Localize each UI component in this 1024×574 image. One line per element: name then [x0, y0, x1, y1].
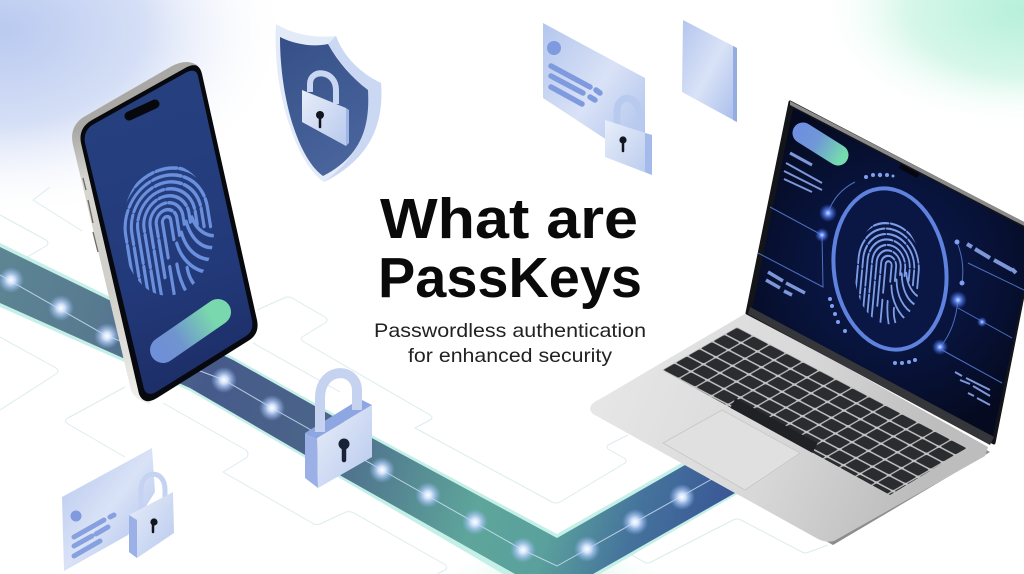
shield with padlock icon: [276, 24, 381, 182]
keyboard: [662, 327, 968, 495]
small card avatar: [70, 510, 82, 522]
card avatar: [547, 41, 561, 55]
card text lines: [551, 66, 600, 104]
screen pill: [803, 133, 838, 155]
subtitle: Passwordless authentication: [374, 320, 646, 342]
blank glass tile: [682, 20, 737, 122]
laptop lid and screen: [747, 101, 1024, 445]
glowing nodes on band: [0, 267, 695, 563]
smartphone with fingerprint: [72, 62, 258, 404]
title: PassKeys: [378, 246, 642, 310]
screen fingerprint: [849, 216, 927, 334]
phone side buttons: [83, 178, 98, 252]
shield padlock: [302, 73, 349, 146]
screen fingerprint ring: [823, 181, 957, 357]
laptop: [590, 101, 1024, 545]
phone screen: [85, 71, 252, 394]
subtitle: for enhanced security: [408, 345, 612, 367]
circuit outline traces: [0, 187, 828, 574]
small id card with padlock, bottom left: [62, 448, 174, 571]
small card text lines: [74, 515, 114, 556]
trackpad: [663, 410, 800, 490]
screen sparks: [815, 204, 987, 355]
phone fingerprint: [111, 154, 226, 313]
screen glowing dots: [828, 173, 964, 365]
screen interface lines and text: [758, 182, 1024, 383]
small card padlock: [129, 474, 174, 558]
shield face: [280, 37, 368, 176]
title: [378, 187, 642, 310]
subtitle: [374, 320, 646, 367]
laptop camera notch: [900, 166, 918, 176]
laptop base: [590, 312, 990, 545]
title: What are: [380, 187, 638, 251]
card padlock: [605, 98, 652, 175]
phone camera notch: [129, 104, 155, 116]
screen text bars: [766, 153, 1016, 405]
id card with padlock, top: [543, 23, 652, 175]
data path band: [0, 243, 739, 574]
big keyhole: [342, 447, 346, 460]
phone gradient pill button: [163, 312, 218, 350]
large padlock on band: [305, 373, 372, 488]
space bar: [733, 403, 815, 448]
